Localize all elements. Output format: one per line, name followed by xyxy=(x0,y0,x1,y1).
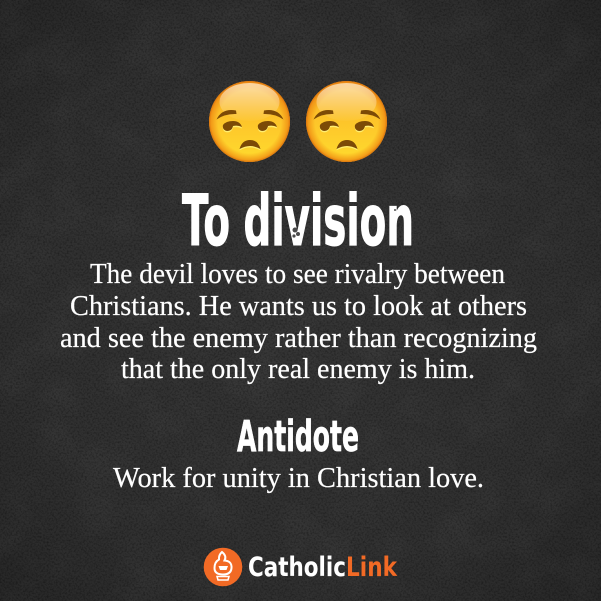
text block: description: The devil loves to see rivalry between xyxy=(90,259,505,290)
text block: antidote message: Work for unity in Christian love. xyxy=(113,463,484,494)
heading: To division: To division xyxy=(182,180,414,262)
text block: description: that the only real enemy is him. xyxy=(121,354,475,385)
logo: CatholicLink: Link xyxy=(346,552,398,583)
icon: orange circle with flame xyxy=(204,548,242,586)
text block: description: and see the enemy rather than recognizing xyxy=(60,323,537,354)
subheading: Antidote: Antidote xyxy=(237,412,359,462)
logo: CatholicLink xyxy=(204,548,398,586)
icon: two unamused face emojis xyxy=(209,81,387,162)
text block: description: Christians. He wants us to look at others xyxy=(70,291,527,322)
text block: description xyxy=(60,259,537,385)
heading: To division xyxy=(182,180,414,262)
wordmark: Catholic xyxy=(248,552,346,583)
